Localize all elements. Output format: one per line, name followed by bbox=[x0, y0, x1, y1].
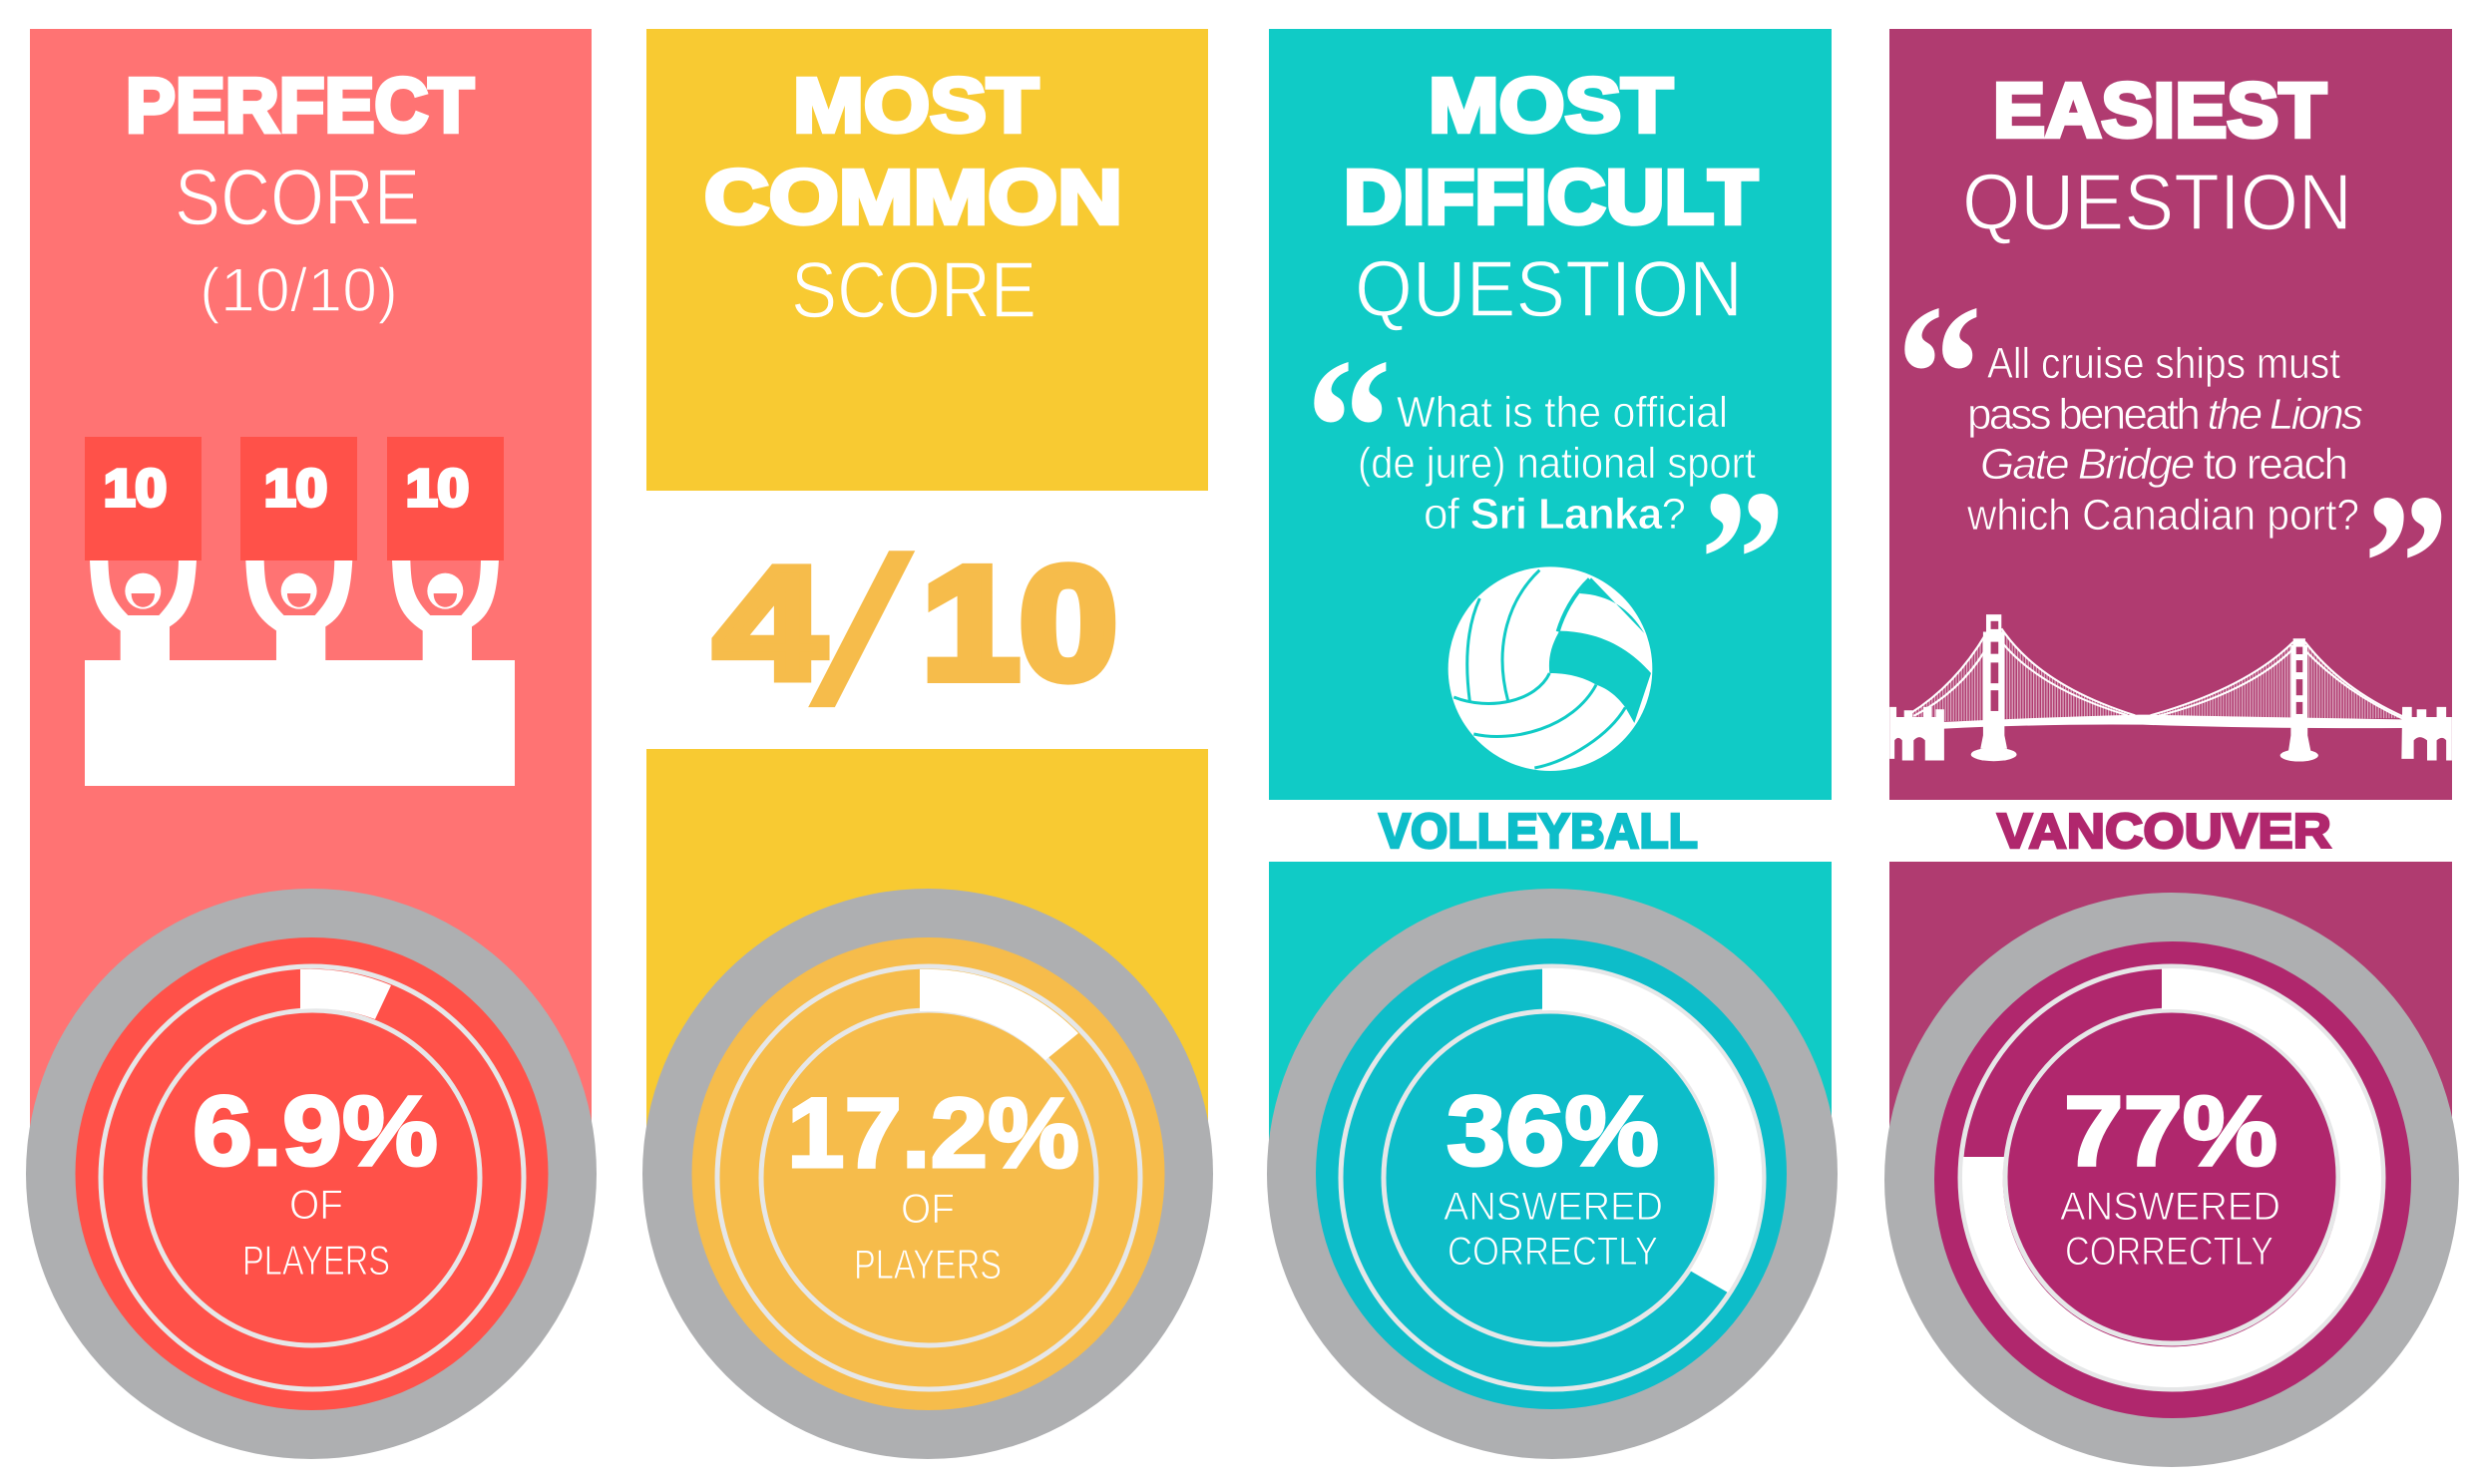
panel background top bbox=[1889, 29, 2452, 800]
panel: most difficult question bbox=[1267, 29, 1838, 1459]
heading: most common score: SCORE bbox=[791, 245, 1036, 334]
heading: most common score bbox=[704, 63, 1122, 334]
big number 4/10: 10 bbox=[922, 534, 1117, 712]
label: answered correctly bbox=[1443, 1185, 1663, 1274]
white arc segment bbox=[1962, 968, 2381, 1387]
heading: most difficult question: MOST bbox=[1429, 63, 1673, 149]
value 77%: 77% bbox=[2064, 1075, 2277, 1186]
opening quote mark: “ bbox=[1896, 264, 1982, 485]
closing quote mark: ” bbox=[1700, 450, 1786, 670]
panel background bottom bbox=[1889, 862, 2452, 1147]
quote: cruise ships question bbox=[1896, 264, 2449, 674]
label: answered correctly: CORRECTLY bbox=[2065, 1230, 2273, 1274]
heading: most difficult question bbox=[1344, 63, 1758, 333]
big number 4/10 bbox=[714, 516, 1117, 747]
label: of players: PLAYERS bbox=[242, 1237, 390, 1284]
panel background bottom bbox=[1269, 862, 1832, 1147]
label: of players bbox=[854, 1185, 1002, 1288]
score card 1: 10 bbox=[104, 460, 167, 518]
quote: cruise ships question: which Canadian port? bbox=[1966, 491, 2359, 540]
label: answered correctly: ANSWERED bbox=[1443, 1185, 1663, 1229]
quote: cruise ships question: All cruise ships must bbox=[1987, 339, 2340, 388]
quote: cruise ships question: Gate Bridge to reach bbox=[1980, 440, 2348, 489]
closing quote mark: ” bbox=[2363, 454, 2449, 674]
donut chart: 77% answered correctly bbox=[1884, 893, 2459, 1467]
score card 2 bbox=[240, 437, 357, 560]
quote: national sport question bbox=[1306, 318, 1786, 670]
panel background top bbox=[646, 29, 1208, 491]
label: of players bbox=[242, 1181, 390, 1284]
label: of players: OF bbox=[901, 1185, 955, 1232]
heading: perfect score: (10/10) bbox=[200, 256, 398, 325]
score card 2: 10 bbox=[264, 460, 327, 518]
heading: easiest question: QUESTION bbox=[1962, 158, 2352, 246]
white arc segment bbox=[300, 969, 391, 1019]
quote: national sport question: What is the official bbox=[1397, 388, 1728, 437]
heading: easiest question: EASIEST bbox=[1993, 68, 2326, 154]
label: answered correctly bbox=[2060, 1185, 2280, 1274]
quote: national sport question: of Sri Lanka? bbox=[1424, 490, 1686, 539]
heading: perfect score: SCORE bbox=[175, 153, 420, 241]
score card 3: 10 bbox=[406, 460, 469, 518]
score card 3 bbox=[387, 437, 504, 560]
donut chart: 36% answered correctly bbox=[1267, 889, 1838, 1459]
judges table bbox=[85, 660, 515, 786]
big number 4/10: / bbox=[794, 516, 928, 747]
icon: volleyball bbox=[1448, 566, 1652, 771]
panel background top bbox=[1269, 29, 1832, 800]
judge 2 bbox=[245, 560, 352, 661]
judge 3 bbox=[392, 560, 499, 661]
heading: perfect score bbox=[126, 63, 474, 325]
answer: volleyball: VOLLEYBALL bbox=[1379, 805, 1698, 859]
heading: most common score: MOST bbox=[793, 63, 1038, 149]
white arc segment bbox=[1542, 968, 1762, 1293]
score card 1 bbox=[85, 437, 202, 560]
heading: most difficult question: DIFFICULT bbox=[1344, 155, 1758, 240]
value 36%: 36% bbox=[1446, 1075, 1659, 1186]
icon: suspension bridge bbox=[1889, 614, 2452, 762]
label: answered correctly: ANSWERED bbox=[2060, 1185, 2280, 1229]
panel: most common score bbox=[642, 29, 1213, 1459]
donut chart: 17.2% of players bbox=[642, 889, 1213, 1459]
heading: perfect score: PERFECT bbox=[126, 63, 474, 149]
panel: easiest question bbox=[1884, 29, 2459, 1467]
answer: vancouver: VANCOUVER bbox=[1997, 805, 2331, 859]
quote: cruise ships question: pass beneath the Lions bbox=[1967, 390, 2363, 439]
judge 1 bbox=[90, 560, 197, 661]
panel: perfect score bbox=[26, 29, 597, 1459]
opening quote mark: “ bbox=[1306, 318, 1392, 539]
panel background bottom bbox=[646, 749, 1208, 1147]
big number 4/10: 4 bbox=[714, 534, 825, 712]
heading: most common score: COMMON bbox=[704, 155, 1122, 240]
quote: national sport question: (de jure) national sport bbox=[1358, 439, 1756, 488]
label: answered correctly: CORRECTLY bbox=[1447, 1230, 1658, 1274]
icon: judges holding score cards bbox=[85, 437, 515, 786]
heading: easiest question bbox=[1962, 68, 2352, 246]
white arc segment bbox=[920, 969, 1078, 1060]
value 17.2%: 17.2% bbox=[787, 1077, 1079, 1188]
heading: most difficult question: QUESTION bbox=[1355, 244, 1743, 333]
value 6.9%: 6.9% bbox=[193, 1075, 438, 1186]
label: of players: PLAYERS bbox=[854, 1241, 1002, 1288]
donut chart: 6.9% of players bbox=[26, 889, 597, 1459]
label: of players: OF bbox=[289, 1181, 343, 1228]
panel background bbox=[30, 29, 592, 1147]
